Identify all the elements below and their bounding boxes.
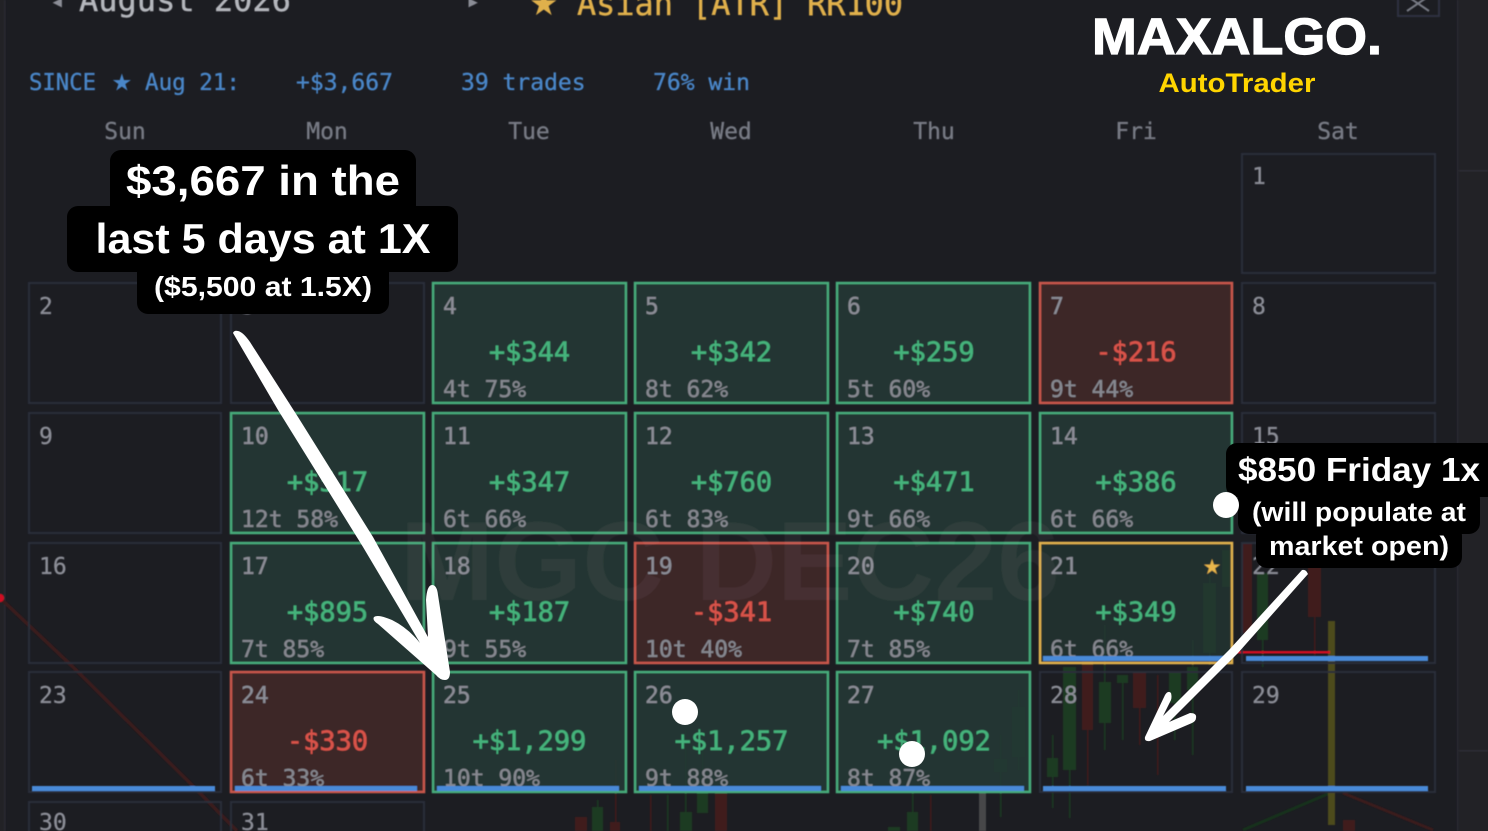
- cell 24: 24: [241, 683, 269, 709]
- cell 17: +$895: [287, 597, 368, 628]
- cell 27: [837, 672, 1030, 792]
- cell 23: [29, 672, 221, 792]
- cell 22: [1242, 543, 1435, 663]
- cell 17: [231, 543, 424, 663]
- weekday headers: [104, 119, 1359, 145]
- cell 1: [1242, 154, 1435, 273]
- cell 11: 6t 66%: [443, 507, 526, 533]
- cell 27: 27: [847, 683, 875, 709]
- cell 4: [433, 283, 626, 403]
- logo: AutoTrader: [1158, 68, 1316, 98]
- cell 27: +$1,092: [877, 726, 991, 757]
- cell 10: 12t 58%: [241, 507, 338, 533]
- background candlestick chart: [0, 543, 1433, 831]
- cell 30: [29, 802, 221, 831]
- cell 24: -$330: [287, 726, 368, 757]
- cell 8: [1242, 283, 1435, 403]
- cell 9: [29, 413, 221, 533]
- callout: Friday profit: (will populate at: [1252, 497, 1466, 527]
- cell 4: 4t 75%: [443, 377, 526, 403]
- weekday headers: Mon: [306, 119, 348, 145]
- cell 13: 9t 66%: [847, 507, 930, 533]
- weekday headers: Sun: [104, 119, 146, 145]
- cell 14: 6t 66%: [1050, 507, 1133, 533]
- cell 14: 14: [1050, 424, 1078, 450]
- cell 26: 9t 88%: [645, 766, 728, 792]
- cell 1: 1: [1252, 164, 1266, 190]
- summary stats row: ★: [112, 71, 132, 96]
- cell 28: 28: [1050, 683, 1078, 709]
- cell 21 highlighted start day: 6t 66%: [1050, 637, 1133, 663]
- summary stats row: +$3,667: [296, 70, 393, 96]
- marker dot: [899, 741, 925, 767]
- summary stats row: 76% win: [653, 70, 750, 96]
- cell 12: [635, 413, 828, 533]
- cell 31: [231, 802, 424, 831]
- cell 19: 10t 40%: [645, 637, 742, 663]
- cell 19: 19: [645, 554, 673, 580]
- arrow: to Aug 25: [233, 331, 450, 680]
- cell 6: +$259: [893, 337, 975, 368]
- callout: Friday profit: market open): [1269, 531, 1449, 561]
- cell 11: 11: [443, 424, 471, 450]
- cell 3: [231, 283, 424, 403]
- cell 19: -$341: [691, 597, 772, 628]
- callout: last 5 days profit: ($5,500 at 1.5X): [154, 271, 372, 302]
- cell 27: 8t 87%: [847, 766, 930, 792]
- weekday headers: Wed: [710, 119, 752, 145]
- cell 23: 23: [39, 683, 67, 709]
- cell 17: 17: [241, 554, 269, 580]
- cell 6: 6: [847, 294, 861, 320]
- cell 10: +$517: [287, 467, 368, 498]
- cell 7: 7: [1050, 294, 1064, 320]
- cell 16: 16: [39, 554, 67, 580]
- cell 20: +$740: [893, 597, 975, 628]
- cell 24: 6t 33%: [241, 766, 324, 792]
- watermark: MGC DEC26: [400, 499, 1060, 624]
- cell 12: 6t 83%: [645, 507, 728, 533]
- cell 9: 9: [39, 424, 53, 450]
- top navigation: month: [50, 0, 480, 19]
- cell 26: [635, 672, 828, 792]
- cell 4: 4: [443, 294, 457, 320]
- cell 6: [837, 283, 1030, 403]
- marker dot: [1213, 492, 1239, 518]
- weekday headers: Thu: [913, 119, 955, 145]
- cell 15: [1242, 413, 1435, 533]
- cell 11: +$347: [489, 467, 570, 498]
- logo: [1092, 8, 1382, 98]
- cell 21 highlighted start day: ★: [1203, 555, 1221, 579]
- marker dot: [672, 699, 698, 725]
- cell 18: +$187: [489, 597, 570, 628]
- cell 22: 22: [1252, 554, 1280, 580]
- cell 16: [29, 543, 221, 663]
- cell 7: -$216: [1095, 337, 1177, 368]
- cell 20: 20: [847, 554, 875, 580]
- cell 19: [635, 543, 828, 663]
- weekday headers: Tue: [508, 119, 550, 145]
- cell 18: 18: [443, 554, 471, 580]
- callout: last 5 days profit: $3,667 in the: [126, 157, 400, 204]
- callout: Friday profit: $850 Friday 1x: [1238, 451, 1481, 488]
- cell 28: [1040, 672, 1232, 792]
- cell 11: [433, 413, 626, 533]
- cell 29: 29: [1252, 683, 1280, 709]
- cell 2: [29, 283, 221, 403]
- cell 5: [635, 283, 828, 403]
- summary stats row: 39 trades: [461, 70, 586, 96]
- cell 13: +$471: [893, 467, 975, 498]
- cell 7: 9t 44%: [1050, 377, 1133, 403]
- cell 12: 12: [645, 424, 673, 450]
- cell 21 highlighted start day: 21: [1050, 554, 1078, 580]
- logo: MAXALGO.: [1092, 8, 1382, 65]
- cell 29: [1242, 672, 1435, 792]
- weekday headers: Sat: [1317, 119, 1359, 145]
- cell 20: [837, 543, 1030, 663]
- cell 7: [1040, 283, 1232, 403]
- cell 18: [433, 543, 626, 663]
- arrow: to Aug 28: [1145, 570, 1308, 741]
- cell 13: [837, 413, 1030, 533]
- cell 14: +$386: [1095, 467, 1177, 498]
- cell 26: 26: [645, 683, 673, 709]
- summary stats row: Aug 21:: [145, 70, 240, 96]
- cell 10: 10: [241, 424, 269, 450]
- cell 25: 25: [443, 683, 471, 709]
- cell 20: 7t 85%: [847, 637, 930, 663]
- weekday headers: Fri: [1115, 119, 1157, 145]
- cell 5: 5: [645, 294, 659, 320]
- cell 18: 9t 55%: [443, 637, 526, 663]
- cell 4: +$344: [489, 337, 570, 368]
- cell 10: [231, 413, 424, 533]
- cell 6: 5t 60%: [847, 377, 930, 403]
- callout: Friday profit: [1226, 443, 1488, 568]
- cell 14: [1040, 413, 1232, 533]
- cell 15: 15: [1252, 424, 1280, 450]
- cell 24: [231, 672, 424, 792]
- cell 21 highlighted start day: [1040, 543, 1232, 663]
- cell 8: 8: [1252, 294, 1266, 320]
- close button: [1398, 0, 1439, 16]
- summary stats row: SINCE: [29, 70, 96, 96]
- cell 26: +$1,257: [675, 726, 788, 757]
- cell 5: +$342: [691, 337, 772, 368]
- cell 13: 13: [847, 424, 875, 450]
- cell 2: 2: [39, 294, 53, 320]
- cell 3: 3: [241, 294, 255, 320]
- cell 5: 8t 62%: [645, 377, 728, 403]
- callout: last 5 days profit: [67, 150, 458, 314]
- cell 21 highlighted start day: +$349: [1095, 597, 1177, 628]
- cell 25: 10t 90%: [443, 766, 540, 792]
- cell 25: +$1,299: [473, 726, 586, 757]
- calendar grid: [29, 154, 1435, 831]
- cell 25: [433, 672, 626, 792]
- cell 17: 7t 85%: [241, 637, 324, 663]
- summary stats row: [29, 70, 750, 96]
- cell 12: +$760: [691, 467, 772, 498]
- callout: last 5 days profit: last 5 days at 1X: [96, 215, 430, 262]
